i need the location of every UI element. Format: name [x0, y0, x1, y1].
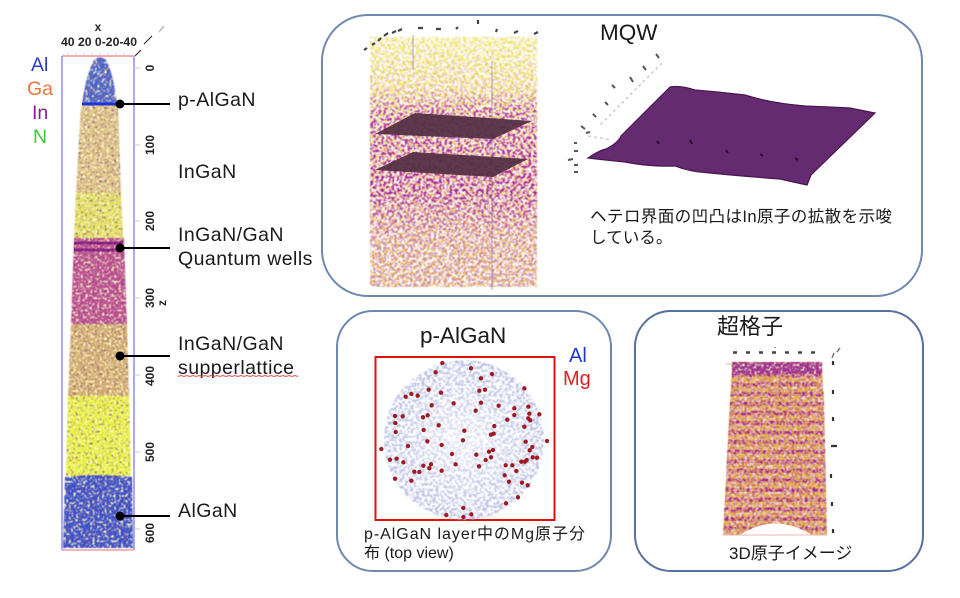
- leader: p-AlGaN: [116, 100, 170, 108]
- column frame: [62, 53, 140, 550]
- z axis labels: 200: [143, 211, 157, 231]
- legend: Al / Mg: Al: [569, 345, 587, 367]
- z axis labels: 400: [143, 366, 157, 386]
- label: InGaN/GaN quantum wells: [178, 224, 313, 270]
- top-view atom map: [376, 357, 554, 520]
- label: AlGaN: AlGaN: [178, 500, 238, 522]
- label: InGaN/GaN supperlattice: supperlattice: [178, 357, 294, 379]
- element legend: N: [33, 126, 47, 148]
- layer stack: [63, 58, 133, 548]
- superlattice atom map: [723, 347, 840, 535]
- leader: superlattice: [116, 352, 170, 360]
- label: InGaN/GaN supperlattice: InGaN/GaN: [178, 333, 284, 355]
- element legend: [27, 54, 53, 148]
- interface surface plot: [568, 54, 875, 185]
- z axis labels: 100: [143, 135, 157, 155]
- legend: Al / Mg: [563, 345, 591, 390]
- superlattice caption: 3D原子イメージ: [729, 544, 852, 563]
- z axis labels: z: [155, 300, 169, 306]
- z axis labels: 0: [143, 64, 157, 71]
- Mg atoms: [379, 361, 549, 519]
- x axis labels: 40 20 0-20-40: [61, 35, 137, 49]
- legend: Al / Mg: Mg: [563, 368, 591, 390]
- x axis labels: x: [95, 20, 102, 34]
- MQW caption: している。: [590, 228, 672, 247]
- element legend: Ga: [27, 78, 53, 100]
- label: InGaN/GaN supperlattice: [178, 333, 298, 379]
- heading: p-AlGaN: p-AlGaN: [420, 323, 506, 348]
- leader: AlGaN: [116, 512, 170, 520]
- element legend: Al: [31, 54, 48, 76]
- label: InGaN/GaN quantum wells: Quantum wells: [178, 248, 313, 270]
- leader: quantum wells: [116, 244, 170, 252]
- z axis labels: 500: [143, 442, 157, 462]
- heading: superlattice: 超格子: [717, 314, 783, 339]
- atom probe column: [62, 53, 140, 550]
- x axis labels: [61, 20, 164, 56]
- panel: superlattice: [635, 311, 923, 571]
- MQW caption: [590, 207, 892, 247]
- label: p-AlGaN: p-AlGaN: [178, 89, 256, 111]
- MQW caption: ヘテロ界面の凹凸はIn原子の拡散を示唆: [590, 207, 892, 226]
- element legend: In: [32, 102, 48, 124]
- p-AlGaN caption: [364, 525, 585, 562]
- label: InGaN: InGaN: [178, 161, 237, 183]
- z axis labels: [143, 64, 169, 543]
- panel: MQW: [322, 15, 922, 296]
- p-AlGaN caption: p-AlGaN layer中のMg原子分: [364, 525, 585, 543]
- heading: MQW: MQW: [600, 20, 658, 45]
- panel: p-AlGaN: [337, 311, 611, 571]
- z axis labels: 300: [143, 288, 157, 308]
- p-AlGaN caption: 布 (top view): [364, 544, 454, 562]
- z axis labels: 600: [143, 523, 157, 543]
- 3D atom map cube: [364, 20, 538, 290]
- label: InGaN/GaN quantum wells: InGaN/GaN: [178, 224, 284, 246]
